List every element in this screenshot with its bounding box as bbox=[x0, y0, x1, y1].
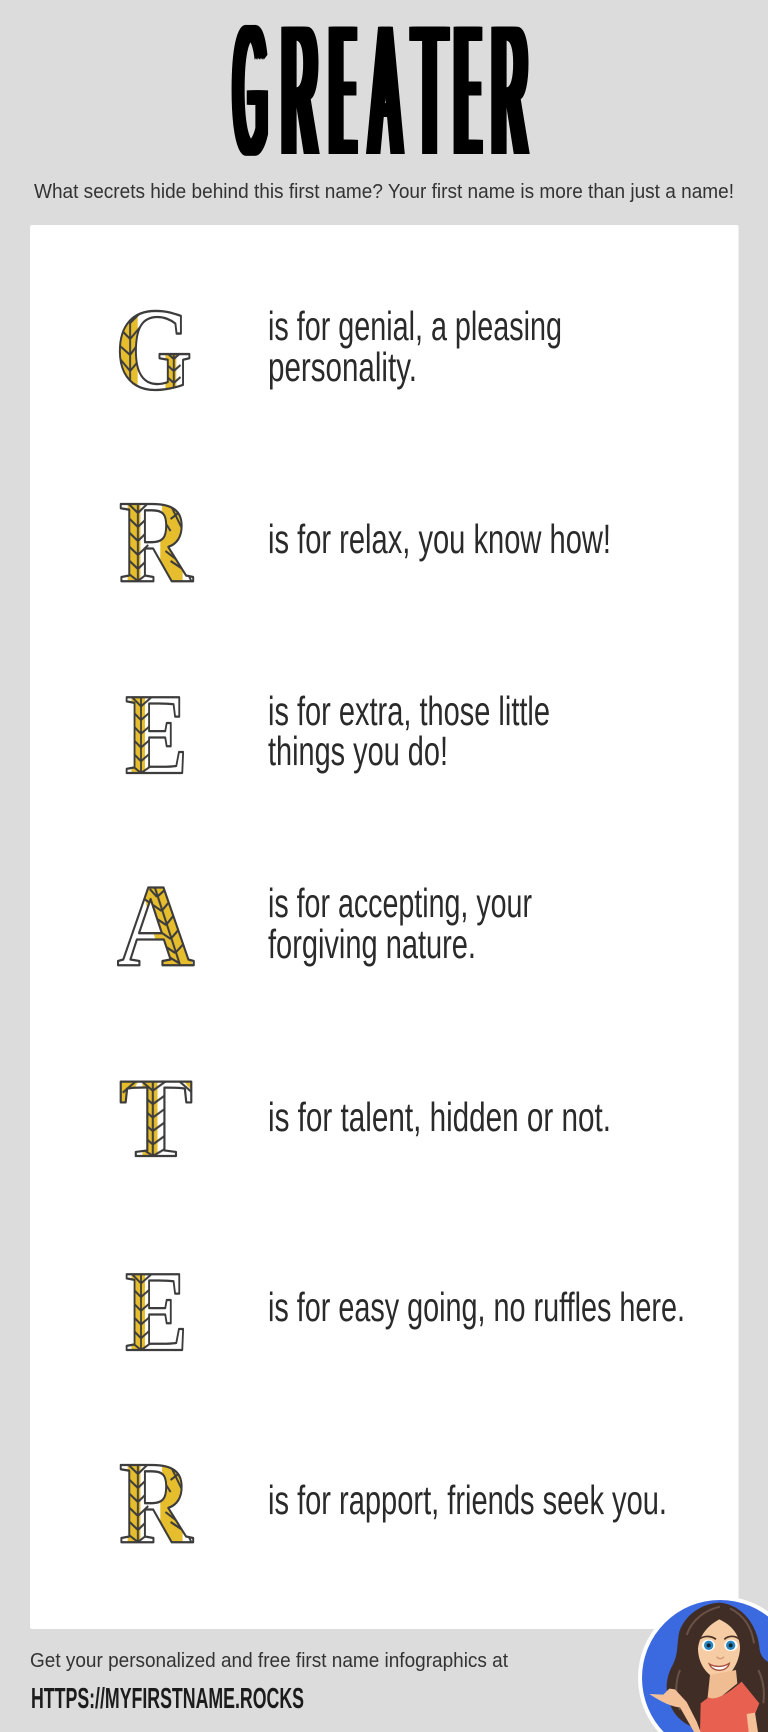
row: second letter E bbox=[125, 1247, 685, 1375]
icon: wheat letter E: E bbox=[125, 670, 188, 798]
icon: avatar of woman in blue circle bbox=[638, 1596, 768, 1732]
text: E meaning: is for extra, those little bbox=[268, 688, 550, 734]
icon: wheat letter G: G bbox=[115, 284, 192, 415]
title bbox=[232, 0, 530, 194]
footer invitation text: Get your personalized and free first name infographics at bbox=[30, 1650, 508, 1672]
icon: wheat letter E: E bbox=[125, 1247, 188, 1375]
icon: wheat letter T: T bbox=[119, 1056, 193, 1181]
text: R meaning: is for relax, you know how! bbox=[268, 516, 611, 562]
row: letter A bbox=[117, 860, 532, 991]
row: second letter R bbox=[119, 1437, 667, 1568]
text: T meaning: is for talent, hidden or not. bbox=[268, 1094, 611, 1140]
text: G meaning: personality. bbox=[268, 344, 417, 390]
icon: wheat letter R: R bbox=[119, 1437, 194, 1568]
row: letter E bbox=[125, 670, 550, 798]
text: E meaning: things you do! bbox=[268, 728, 448, 774]
subtitle: What secrets hide behind this first name? Your first name is more than just a name! bbox=[34, 181, 734, 203]
text: E meaning bbox=[268, 688, 550, 774]
text: A meaning bbox=[268, 880, 532, 967]
row: letter T bbox=[119, 1056, 611, 1181]
text: G meaning bbox=[268, 303, 562, 390]
text: G meaning: is for genial, a pleasing bbox=[268, 303, 562, 349]
icon: wheat letter A: A bbox=[117, 860, 195, 991]
panel: white letter card bbox=[30, 225, 738, 1629]
icon: wheat letter R: R bbox=[119, 476, 194, 607]
row: letter R bbox=[119, 476, 611, 607]
row: letter G bbox=[115, 284, 562, 415]
text: A meaning: forgiving nature. bbox=[268, 921, 476, 967]
text: A meaning: is for accepting, your bbox=[268, 880, 532, 926]
footer url: HTTPS://MYFIRSTNAME.ROCKS bbox=[31, 1683, 304, 1715]
